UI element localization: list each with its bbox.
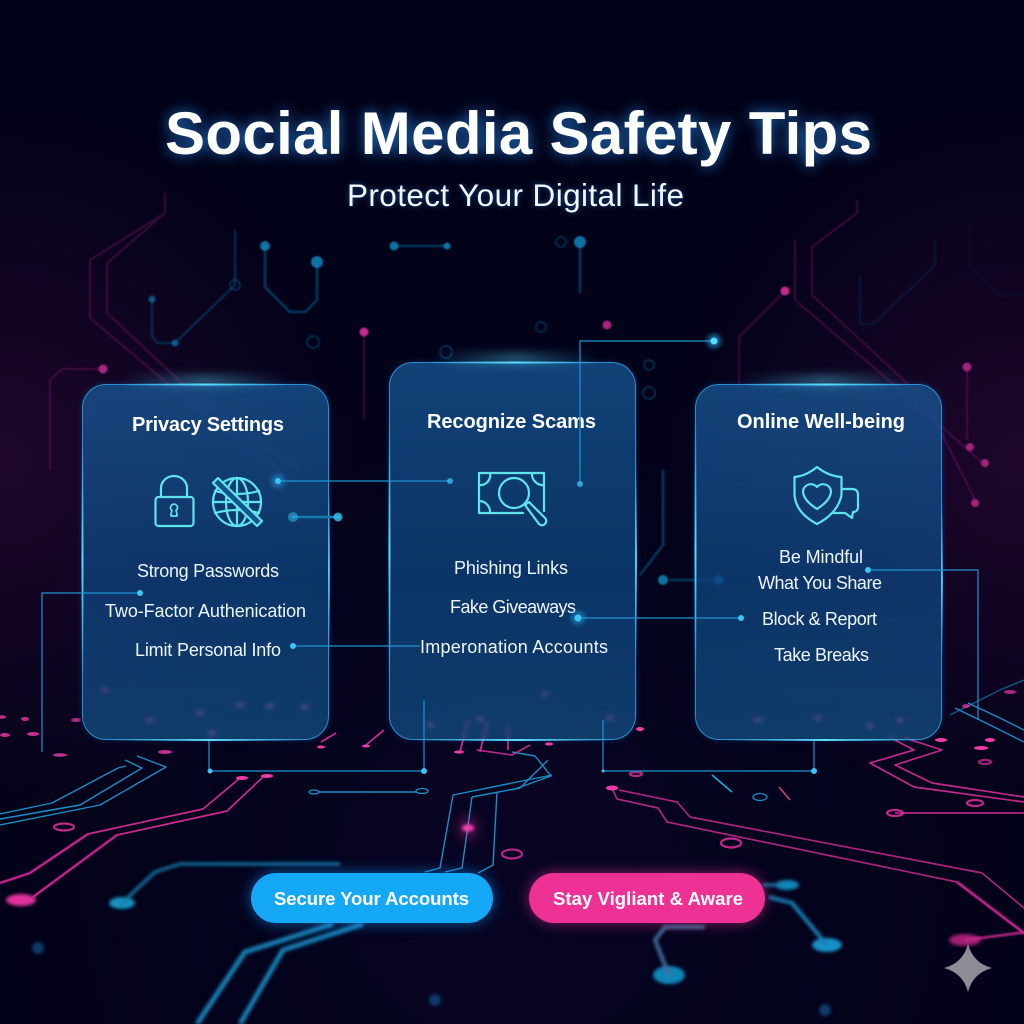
list: privacy tips: Limit Personal Info [134,640,280,660]
button: stay vigilant and aware [529,873,765,923]
list: scam types: Imperonation Accounts [420,636,608,656]
title: Social Media Safety Tips [165,100,872,167]
foreground traces [0,680,1024,1024]
panel: privacy settings [82,384,329,740]
icon: crossed-out globe [212,478,262,526]
list: well-being tips: Block & Report [762,608,876,628]
icon: shield with heart and speech bubble [794,466,858,524]
icon: padlock [155,476,193,526]
heading: recognize scams: Recognize Scams [426,410,596,432]
panel: recognize scams [389,362,636,740]
list: privacy tips [104,560,306,660]
button: secure your accounts [251,873,493,923]
heading: privacy settings: Privacy Settings [132,414,284,436]
icon: sparkle watermark [944,944,992,992]
list: privacy tips: Strong Passwords [136,560,278,580]
list: scam types: Phishing Links [454,558,568,578]
list: privacy tips: Two-Factor Authenication [104,600,306,620]
list: scam types: Fake Giveaways [450,596,576,616]
button: secure your accounts: Secure Your Accounts [274,888,469,909]
icon: banknote under magnifying glass [478,472,546,525]
list: well-being tips: Take Breaks [774,644,868,664]
button: stay vigilant and aware: Stay Vigliant & Aware [553,888,743,909]
subtitle: Protect Your Digital Life [347,177,684,213]
list: well-being tips: What You Share [758,572,882,592]
heading: online well-being: Online Well-being [736,410,904,432]
panel: online well-being [695,384,942,740]
list: well-being tips [758,546,882,664]
list: scam types [420,558,608,656]
list: well-being tips: Be Mindful [778,546,862,566]
